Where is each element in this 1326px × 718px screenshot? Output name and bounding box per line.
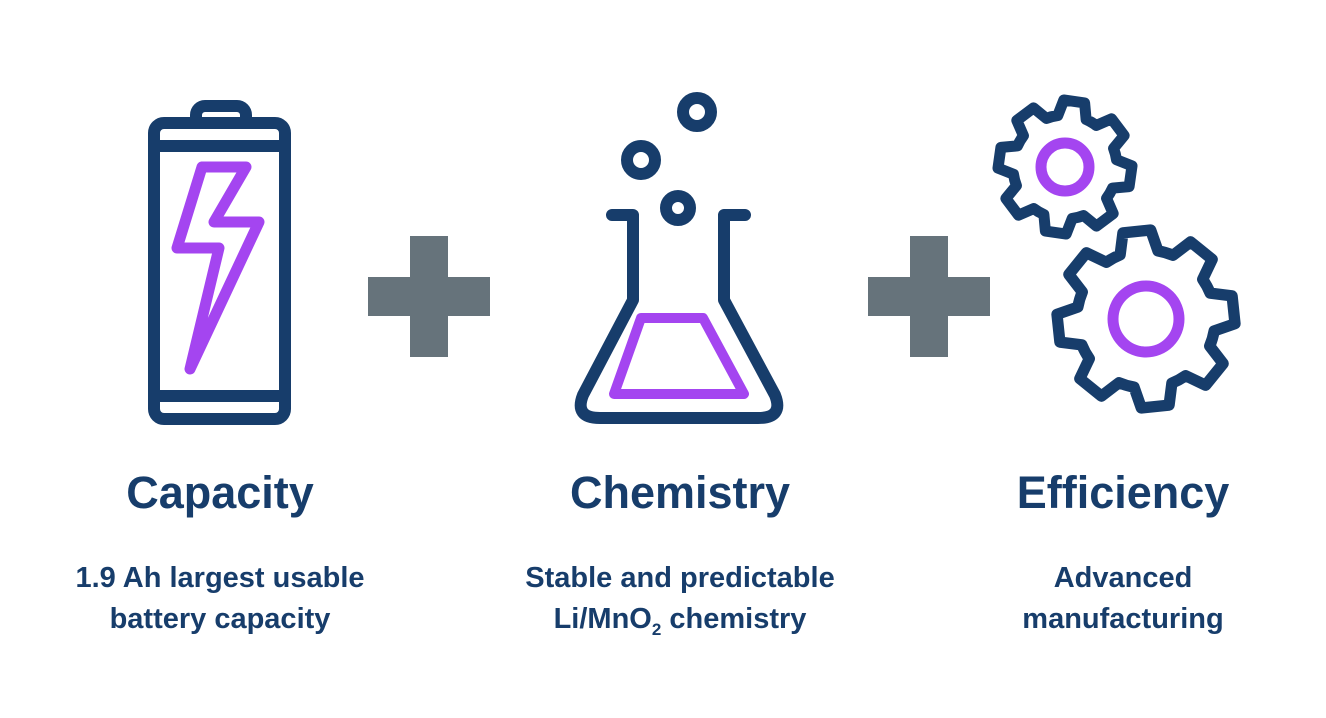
text: capacity: 1.9 Ah largest usable bbox=[75, 562, 365, 594]
icon: gears bbox=[990, 92, 1243, 416]
text: efficiency bbox=[1022, 562, 1224, 635]
text: efficiency: Advanced bbox=[1054, 562, 1192, 594]
heading: Efficiency: Efficiency bbox=[1017, 467, 1229, 518]
plus sign 1 bbox=[368, 236, 490, 357]
text: capacity bbox=[75, 562, 365, 635]
icon: battery bbox=[154, 106, 285, 419]
heading: Capacity: Capacity bbox=[126, 467, 314, 518]
text: efficiency: manufacturing bbox=[1022, 603, 1224, 635]
text: chemistry: Li/MnO2 chemistry bbox=[554, 603, 806, 639]
text: chemistry bbox=[525, 562, 835, 639]
text: chemistry: Stable and predictable bbox=[525, 562, 835, 594]
icon: flask bbox=[581, 98, 777, 418]
text: capacity: battery capacity bbox=[110, 603, 330, 635]
heading: Chemistry: Chemistry bbox=[570, 467, 790, 518]
plus sign 2 bbox=[868, 236, 990, 357]
